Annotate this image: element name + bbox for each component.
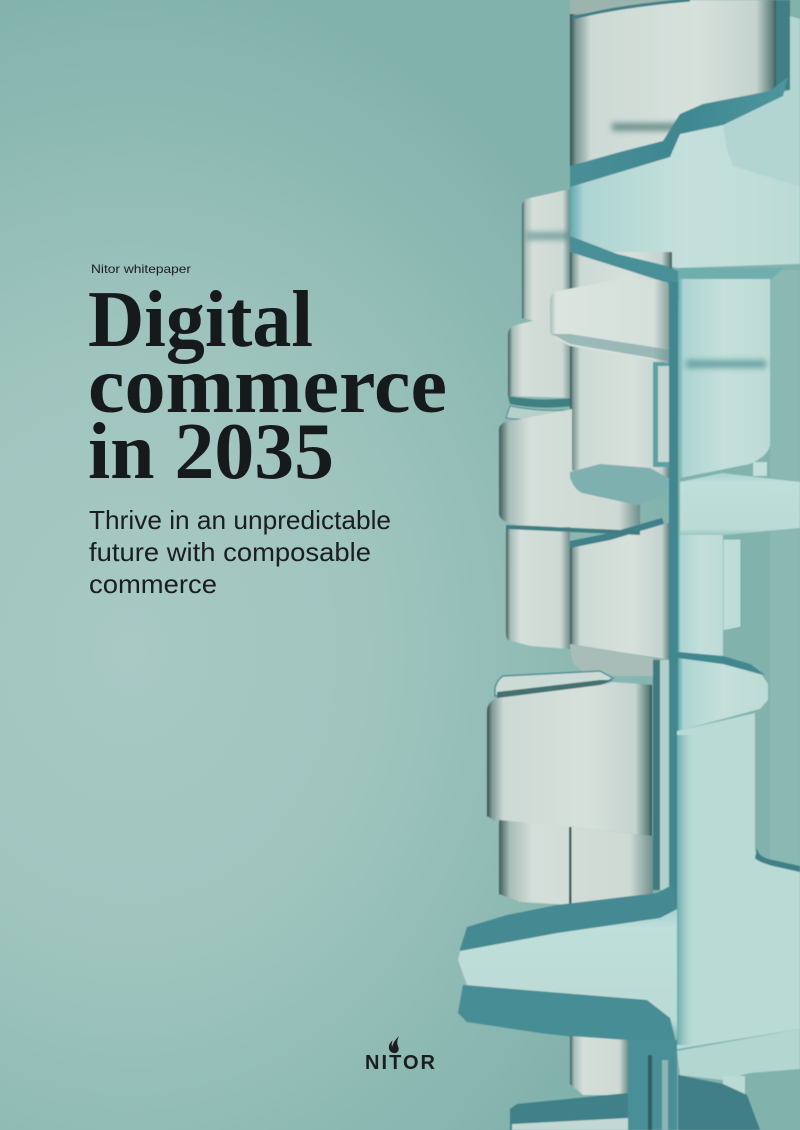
ribbon under upper body: [570, 236, 680, 300]
subtitle: future with composable: [89, 537, 371, 567]
bottom teal strips: [628, 1040, 677, 1130]
collar lower right: [678, 658, 768, 731]
under body: [677, 1029, 800, 1080]
ribbon upper: [570, 77, 788, 187]
logo: Nitor: NITOR: [365, 1052, 436, 1074]
bottom left wing: [510, 1093, 628, 1130]
collar light grey: [550, 277, 672, 364]
title: in 2035: [88, 408, 334, 496]
lower left column: [506, 527, 570, 649]
lower grey column: [499, 820, 653, 905]
ribbon wide: [460, 885, 677, 951]
bottom column: [570, 1036, 628, 1095]
logo: Nitor: [365, 1036, 436, 1074]
back right column shade: [770, 270, 800, 870]
back piece middle left: [508, 316, 572, 398]
right teal column: [678, 272, 770, 478]
back piece lower left: [499, 409, 640, 531]
swirl shelf: [570, 464, 672, 505]
right wing: [680, 473, 800, 539]
light wing body: [458, 909, 677, 1040]
title: [88, 276, 447, 496]
back piece upper left: [522, 189, 570, 330]
subtitle: Thrive in an unpredictable: [89, 505, 391, 535]
teal body upper: [570, 125, 800, 268]
bottom wing: [678, 1075, 760, 1130]
under column: [570, 644, 653, 676]
sculpture: spiral column illustration: [458, 0, 800, 1130]
icon: flame: [389, 1036, 399, 1053]
main right body: [677, 713, 800, 1049]
light piece right: [753, 462, 767, 476]
right top light panel: [720, 16, 800, 190]
right lower columns: [723, 539, 741, 631]
centre column: [570, 252, 672, 480]
thin ribbon under swirl: [570, 518, 664, 548]
grey block: [487, 682, 652, 836]
small top left collar: [495, 671, 613, 696]
title: Digital: [88, 276, 313, 364]
subtitle: [89, 505, 391, 599]
vertical strip: [653, 660, 660, 890]
eyebrow label: Nitor whitepaper: [91, 262, 191, 276]
title: commerce: [88, 342, 447, 430]
lower centre column: [570, 522, 672, 660]
ribbon lower: [458, 985, 677, 1049]
top column: [570, 0, 777, 170]
subtitle: commerce: [89, 569, 217, 599]
